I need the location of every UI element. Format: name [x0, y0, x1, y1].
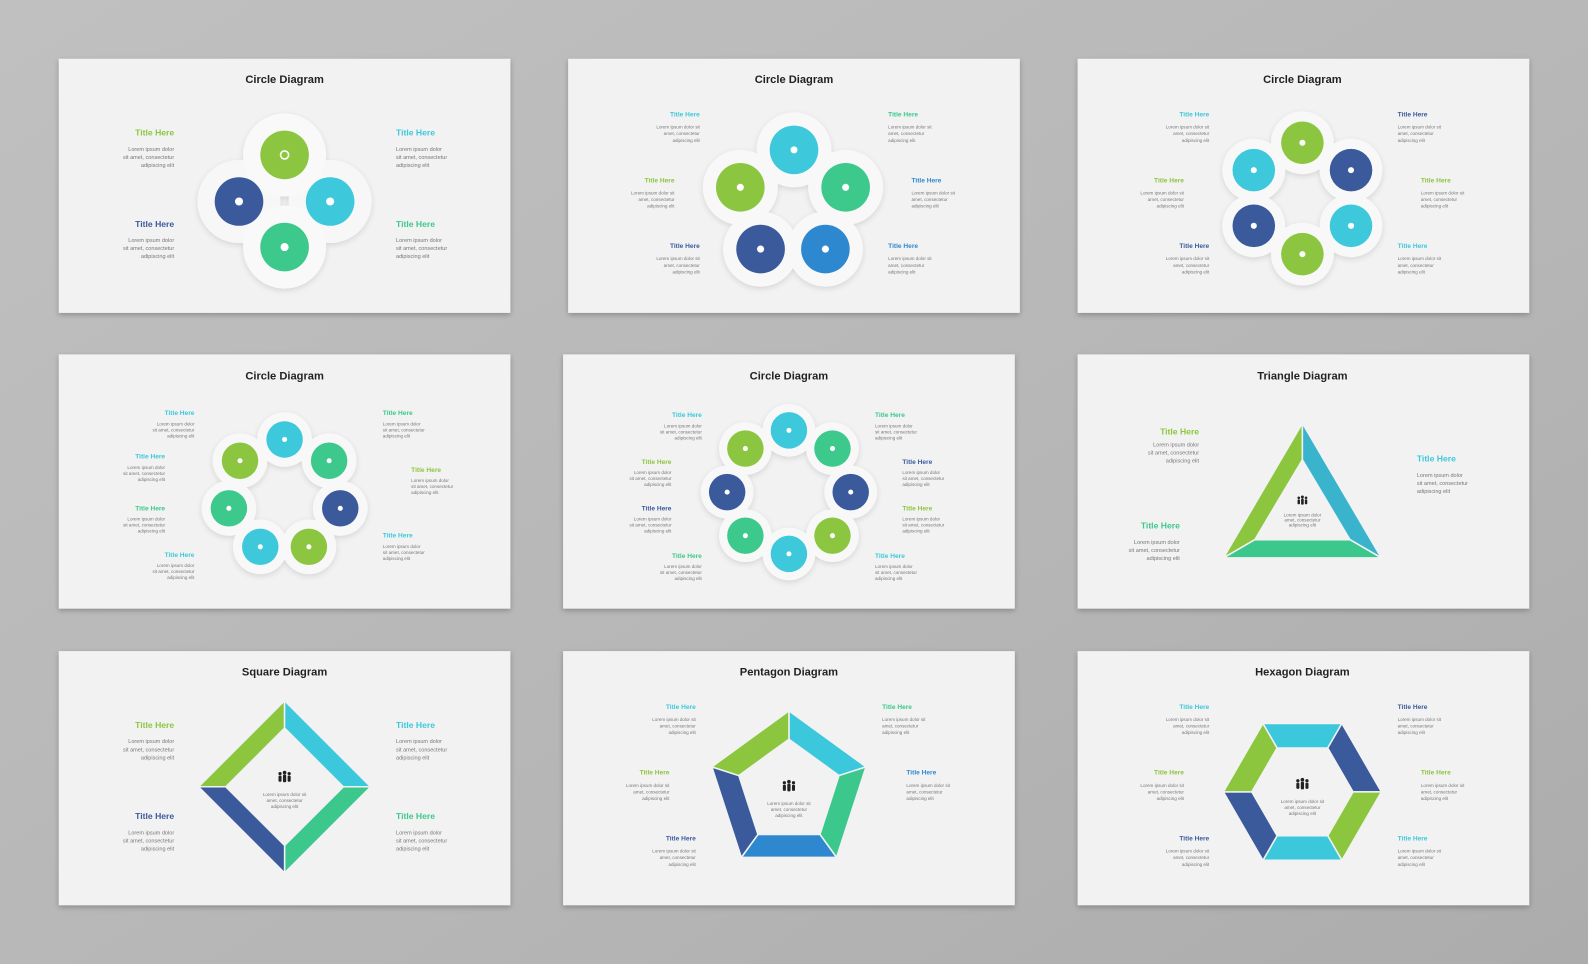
- text blocks: sit amet, consectetur: [123, 838, 174, 844]
- text blocks: amet, consectetur: [1398, 263, 1434, 268]
- text blocks: Title Here: [396, 128, 435, 138]
- center icon and text: adipiscing elit: [1289, 811, 1317, 816]
- center icon and text: Lorem ipsum dolor: [1284, 512, 1322, 517]
- text blocks: sit amet, consectetur: [660, 429, 702, 434]
- text blocks: sit amet, consectetur: [396, 747, 447, 753]
- text blocks: adipiscing elit: [138, 477, 166, 482]
- text blocks: adipiscing elit: [1421, 204, 1449, 209]
- text blocks: adipiscing elit: [875, 576, 903, 581]
- text blocks: Lorem ipsum dolor: [128, 830, 174, 836]
- text blocks: amet, consectetur: [882, 724, 919, 729]
- text blocks: Title Here: [672, 553, 702, 560]
- text blocks: adipiscing elit: [642, 796, 670, 801]
- text blocks: Title Here: [640, 770, 670, 777]
- text blocks: [631, 111, 956, 274]
- text blocks: Lorem ipsum dolor: [128, 147, 174, 153]
- text blocks: adipiscing elit: [675, 435, 703, 440]
- text blocks: sit amet, consectetur: [396, 838, 447, 844]
- title: Circle Diagram: [750, 371, 828, 383]
- text blocks: adipiscing elit: [1417, 489, 1451, 495]
- title: Square Diagram: [242, 666, 327, 678]
- text blocks: adipiscing elit: [1182, 862, 1210, 867]
- text blocks: adipiscing elit: [141, 847, 175, 853]
- text blocks: Lorem ipsum dolor sit: [882, 717, 926, 722]
- title: Pentagon Diagram: [740, 666, 838, 678]
- text blocks: Lorem ipsum dolor: [1153, 443, 1199, 449]
- text blocks: adipiscing elit: [668, 862, 696, 867]
- text blocks: sit amet, consectetur: [396, 246, 447, 252]
- text blocks: adipiscing elit: [141, 755, 175, 761]
- text blocks: Title Here: [875, 553, 905, 560]
- text blocks: Title Here: [396, 720, 435, 730]
- text blocks: adipiscing elit: [1421, 796, 1449, 801]
- text blocks: adipiscing elit: [1182, 269, 1210, 274]
- text blocks: sit amet, consectetur: [1129, 548, 1180, 554]
- text blocks: Lorem ipsum dolor sit: [911, 190, 956, 195]
- text blocks: Lorem ipsum dolor: [383, 544, 421, 549]
- text blocks: adipiscing elit: [644, 529, 672, 534]
- slide 2: 5-circle diagram: [568, 59, 1020, 313]
- text blocks: amet, consectetur: [1173, 724, 1210, 729]
- text blocks: sit amet, consectetur: [152, 569, 195, 574]
- title: Circle Diagram: [245, 371, 324, 383]
- text blocks: amet, consectetur: [1173, 263, 1210, 268]
- text blocks: adipiscing elit: [1166, 459, 1200, 465]
- text blocks: adipiscing elit: [902, 482, 930, 487]
- text blocks: Lorem ipsum dolor sit: [888, 125, 932, 130]
- center icon and text: amet, consectetur: [267, 798, 303, 803]
- text blocks: adipiscing elit: [675, 576, 703, 581]
- text blocks: Title Here: [670, 111, 700, 118]
- text blocks: Title Here: [135, 505, 165, 512]
- slide 8: pentagon diagram: [563, 651, 1015, 905]
- text blocks: Lorem ipsum dolor: [634, 516, 672, 521]
- text blocks: Title Here: [135, 128, 174, 138]
- text blocks: adipiscing elit: [1157, 796, 1185, 801]
- text blocks: Title Here: [383, 410, 413, 417]
- text blocks: Title Here: [1421, 770, 1451, 777]
- text blocks: adipiscing elit: [138, 529, 166, 534]
- text blocks: Title Here: [135, 720, 174, 730]
- text blocks: sit amet, consectetur: [1148, 451, 1199, 457]
- text blocks: Title Here: [642, 459, 672, 466]
- text blocks: Lorem ipsum dolor: [1417, 473, 1463, 479]
- text blocks: sit amet, consectetur: [1417, 481, 1468, 487]
- text blocks: Lorem ipsum dolor: [383, 421, 421, 426]
- slide 1: 4-circle diagram: [59, 59, 510, 313]
- text blocks: sit amet, consectetur: [123, 155, 174, 161]
- text blocks: Title Here: [383, 533, 413, 540]
- text blocks: Lorem ipsum dolor sit: [906, 783, 951, 788]
- text blocks: amet, consectetur: [660, 855, 696, 860]
- center icon and text: adipiscing elit: [271, 804, 299, 809]
- center icon and text: [263, 771, 307, 809]
- text blocks: Lorem ipsum dolor sit: [1140, 783, 1185, 788]
- text blocks: [1129, 426, 1468, 562]
- text blocks: Lorem ipsum dolor sit: [888, 256, 932, 261]
- text blocks: Title Here: [902, 459, 933, 466]
- text blocks: [123, 720, 447, 853]
- center icon and text: Lorem ipsum dolor sit: [263, 792, 307, 797]
- icon: people: [278, 771, 291, 782]
- text blocks: Lorem ipsum dolor sit: [1398, 717, 1442, 722]
- text blocks: [1140, 111, 1465, 274]
- text blocks: sit amet, consectetur: [630, 476, 672, 481]
- text blocks: amet, consectetur: [1398, 724, 1434, 729]
- center icon and text: [1281, 778, 1325, 816]
- triangle: [1223, 423, 1381, 558]
- text blocks: Title Here: [135, 454, 165, 461]
- title: Circle Diagram: [755, 74, 833, 86]
- text blocks: amet, consectetur: [888, 263, 925, 268]
- text blocks: adipiscing elit: [672, 138, 701, 143]
- text blocks: Lorem ipsum dolor: [396, 147, 442, 153]
- text blocks: Title Here: [165, 552, 195, 559]
- text blocks: sit amet, consectetur: [902, 523, 945, 528]
- text blocks: adipiscing elit: [911, 204, 940, 209]
- slide 4: 7-circle diagram: [59, 354, 510, 609]
- text blocks: amet, consectetur: [638, 197, 675, 202]
- center icon and text: adipiscing elit: [1289, 523, 1317, 528]
- text blocks: sit amet, consectetur: [411, 484, 454, 489]
- text blocks: Title Here: [1417, 454, 1456, 464]
- text blocks: Lorem ipsum dolor sit: [656, 256, 701, 261]
- text blocks: adipiscing elit: [668, 730, 696, 735]
- text blocks: sit amet, consectetur: [396, 155, 447, 161]
- text blocks: adipiscing elit: [383, 433, 411, 438]
- text blocks: Title Here: [1398, 835, 1428, 842]
- text blocks: adipiscing elit: [1398, 138, 1426, 143]
- text blocks: amet, consectetur: [1421, 789, 1458, 794]
- text blocks: Lorem ipsum dolor: [127, 465, 166, 470]
- text blocks: Lorem ipsum dolor: [127, 516, 166, 521]
- text blocks: Title Here: [888, 111, 918, 118]
- text blocks: Title Here: [1398, 243, 1428, 250]
- text blocks: [123, 410, 454, 580]
- text blocks: adipiscing elit: [902, 529, 930, 534]
- text blocks: Lorem ipsum dolor: [902, 470, 941, 475]
- center icon and text: amet, consectetur: [1284, 805, 1321, 810]
- text blocks: adipiscing elit: [396, 755, 430, 761]
- text blocks: adipiscing elit: [1157, 204, 1185, 209]
- slide 6: triangle diagram: [1078, 354, 1529, 609]
- center icon and text: [767, 780, 811, 818]
- center icon and text: Lorem ipsum dolor sit: [767, 801, 811, 806]
- text blocks: Lorem ipsum dolor: [128, 238, 174, 244]
- text blocks: amet, consectetur: [1398, 131, 1434, 136]
- slide 5: 8-circle diagram: [563, 354, 1015, 609]
- text blocks: adipiscing elit: [167, 433, 195, 438]
- text blocks: Title Here: [645, 177, 675, 184]
- text blocks: Lorem ipsum dolor: [396, 739, 442, 745]
- title: Circle Diagram: [1263, 74, 1342, 86]
- text blocks: Lorem ipsum dolor: [128, 739, 174, 745]
- text blocks: amet, consectetur: [1421, 197, 1458, 202]
- text blocks: Title Here: [1154, 177, 1184, 184]
- title: Hexagon Diagram: [1255, 666, 1350, 678]
- text blocks: adipiscing elit: [1147, 556, 1180, 562]
- text blocks: Lorem ipsum dolor sit: [652, 849, 696, 854]
- text blocks: amet, consectetur: [911, 197, 948, 202]
- center icon and text: Lorem ipsum dolor sit: [1281, 799, 1325, 804]
- slide 9: hexagon diagram: [1078, 651, 1529, 905]
- text blocks: Lorem ipsum dolor sit: [1421, 783, 1465, 788]
- text blocks: Title Here: [135, 219, 174, 229]
- text blocks: Title Here: [1141, 521, 1180, 531]
- text blocks: sit amet, consectetur: [383, 550, 425, 555]
- text blocks: Title Here: [875, 412, 905, 419]
- text blocks: sit amet, consectetur: [630, 523, 672, 528]
- text blocks: sit amet, consectetur: [875, 429, 917, 434]
- text blocks: Lorem ipsum dolor: [1134, 540, 1180, 546]
- center icon and text: amet, consectetur: [771, 807, 807, 812]
- text blocks: Title Here: [888, 243, 918, 250]
- text blocks: adipiscing elit: [875, 435, 903, 440]
- text blocks: sit amet, consectetur: [875, 570, 917, 575]
- text blocks: Lorem ipsum dolor sit: [1166, 849, 1210, 854]
- text blocks: Lorem ipsum dolor sit: [1398, 125, 1442, 130]
- text blocks: Lorem ipsum dolor sit: [1166, 125, 1210, 130]
- text blocks: amet, consectetur: [660, 724, 696, 729]
- slide 3: 6-circle diagram: [1078, 59, 1529, 313]
- text blocks: amet, consectetur: [906, 789, 943, 794]
- text blocks: sit amet, consectetur: [123, 523, 166, 528]
- text blocks: sit amet, consectetur: [902, 476, 945, 481]
- text blocks: adipiscing elit: [396, 163, 430, 169]
- text blocks: Title Here: [165, 410, 195, 417]
- text blocks: Lorem ipsum dolor: [664, 564, 702, 569]
- text blocks: Lorem ipsum dolor sit: [1166, 717, 1210, 722]
- text blocks: adipiscing elit: [167, 575, 195, 580]
- text blocks: sit amet, consectetur: [152, 427, 195, 432]
- text blocks: adipiscing elit: [1398, 730, 1426, 735]
- text blocks: adipiscing elit: [906, 796, 934, 801]
- text blocks: adipiscing elit: [672, 269, 701, 274]
- text blocks: adipiscing elit: [1182, 138, 1210, 143]
- text blocks: Title Here: [1160, 426, 1199, 436]
- text blocks: Lorem ipsum dolor: [396, 238, 442, 244]
- text blocks: Lorem ipsum dolor: [875, 423, 913, 428]
- text blocks: amet, consectetur: [1148, 789, 1184, 794]
- text blocks: amet, consectetur: [664, 263, 700, 268]
- text blocks: [1140, 704, 1465, 867]
- text blocks: Title Here: [1154, 770, 1184, 777]
- text blocks: Title Here: [1179, 835, 1210, 842]
- text blocks: amet, consectetur: [1173, 131, 1210, 136]
- text blocks: Title Here: [642, 505, 672, 512]
- icon: people: [1296, 778, 1309, 789]
- text blocks: [630, 412, 945, 581]
- circle ring: [1222, 111, 1382, 286]
- text blocks: Lorem ipsum dolor: [157, 563, 195, 568]
- text blocks: adipiscing elit: [141, 254, 175, 260]
- text blocks: sit amet, consectetur: [123, 471, 166, 476]
- text blocks: Title Here: [1179, 704, 1210, 711]
- text blocks: Lorem ipsum dolor sit: [1398, 256, 1442, 261]
- text blocks: sit amet, consectetur: [383, 427, 425, 432]
- text blocks: Title Here: [1398, 111, 1428, 118]
- text blocks: Lorem ipsum dolor: [411, 478, 449, 483]
- text blocks: adipiscing elit: [1182, 730, 1210, 735]
- text blocks: sit amet, consectetur: [123, 246, 174, 252]
- text blocks: adipiscing elit: [396, 254, 430, 260]
- text blocks: Title Here: [670, 243, 700, 250]
- text blocks: Lorem ipsum dolor: [157, 421, 195, 426]
- text blocks: amet, consectetur: [1398, 855, 1434, 860]
- slide 7: square diagram: [59, 651, 510, 905]
- text blocks: adipiscing elit: [882, 730, 910, 735]
- text blocks: adipiscing elit: [888, 138, 916, 143]
- text blocks: Title Here: [911, 177, 942, 184]
- text blocks: adipiscing elit: [888, 269, 916, 274]
- text blocks: sit amet, consectetur: [660, 570, 702, 575]
- circle ring: [202, 412, 368, 574]
- text blocks: Title Here: [666, 704, 696, 711]
- circle cluster: [197, 113, 372, 289]
- text blocks: Title Here: [396, 811, 435, 821]
- text blocks: Lorem ipsum dolor: [634, 470, 672, 475]
- text blocks: Title Here: [1421, 177, 1451, 184]
- text blocks: adipiscing elit: [411, 490, 439, 495]
- text blocks: Title Here: [411, 467, 441, 474]
- text blocks: adipiscing elit: [644, 482, 672, 487]
- text blocks: amet, consectetur: [633, 789, 670, 794]
- text blocks: Title Here: [882, 704, 912, 711]
- text blocks: Title Here: [135, 811, 174, 821]
- text blocks: adipiscing elit: [1398, 269, 1426, 274]
- hexagon: [1223, 724, 1381, 860]
- text blocks: adipiscing elit: [396, 847, 430, 853]
- center icon and text: amet, consectetur: [1284, 517, 1321, 522]
- text blocks: Lorem ipsum dolor: [664, 423, 702, 428]
- pentagon: [712, 711, 866, 857]
- diamond: [198, 701, 371, 873]
- text blocks: Lorem ipsum dolor sit: [1421, 190, 1465, 195]
- circle ring: [701, 404, 877, 580]
- text blocks: amet, consectetur: [1148, 197, 1184, 202]
- text blocks: Lorem ipsum dolor sit: [1398, 849, 1442, 854]
- text blocks: Lorem ipsum dolor sit: [652, 717, 696, 722]
- text blocks: amet, consectetur: [888, 131, 925, 136]
- text blocks: Title Here: [1179, 243, 1210, 250]
- text blocks: Lorem ipsum dolor sit: [1140, 190, 1185, 195]
- text blocks: adipiscing elit: [647, 204, 675, 209]
- text blocks: Lorem ipsum dolor sit: [626, 783, 670, 788]
- text blocks: Lorem ipsum dolor sit: [1166, 256, 1210, 261]
- text blocks: [626, 704, 951, 867]
- title: Triangle Diagram: [1257, 371, 1348, 383]
- text blocks: Lorem ipsum dolor sit: [631, 190, 675, 195]
- title: Circle Diagram: [245, 74, 324, 86]
- text blocks: Title Here: [902, 505, 933, 512]
- text blocks: Title Here: [1398, 704, 1428, 711]
- text blocks: amet, consectetur: [1173, 855, 1210, 860]
- icon: people: [1297, 496, 1307, 505]
- text blocks: Title Here: [672, 412, 702, 419]
- text blocks: Lorem ipsum dolor sit: [656, 125, 701, 130]
- text blocks: amet, consectetur: [664, 131, 700, 136]
- center icon and text: adipiscing elit: [775, 813, 803, 818]
- text blocks: Lorem ipsum dolor: [902, 516, 941, 521]
- text blocks: Title Here: [1179, 111, 1210, 118]
- text blocks: Title Here: [666, 835, 696, 842]
- text blocks: adipiscing elit: [1398, 862, 1426, 867]
- text blocks: Lorem ipsum dolor: [875, 564, 913, 569]
- center icon and text: [1284, 496, 1322, 528]
- text blocks: [123, 128, 447, 260]
- text blocks: Lorem ipsum dolor: [396, 830, 442, 836]
- text blocks: Title Here: [906, 770, 937, 777]
- icon: people: [783, 780, 795, 791]
- text blocks: adipiscing elit: [383, 556, 411, 561]
- text blocks: sit amet, consectetur: [123, 747, 174, 753]
- text blocks: Title Here: [396, 219, 435, 229]
- text blocks: adipiscing elit: [141, 163, 175, 169]
- circle cluster: [703, 112, 883, 287]
